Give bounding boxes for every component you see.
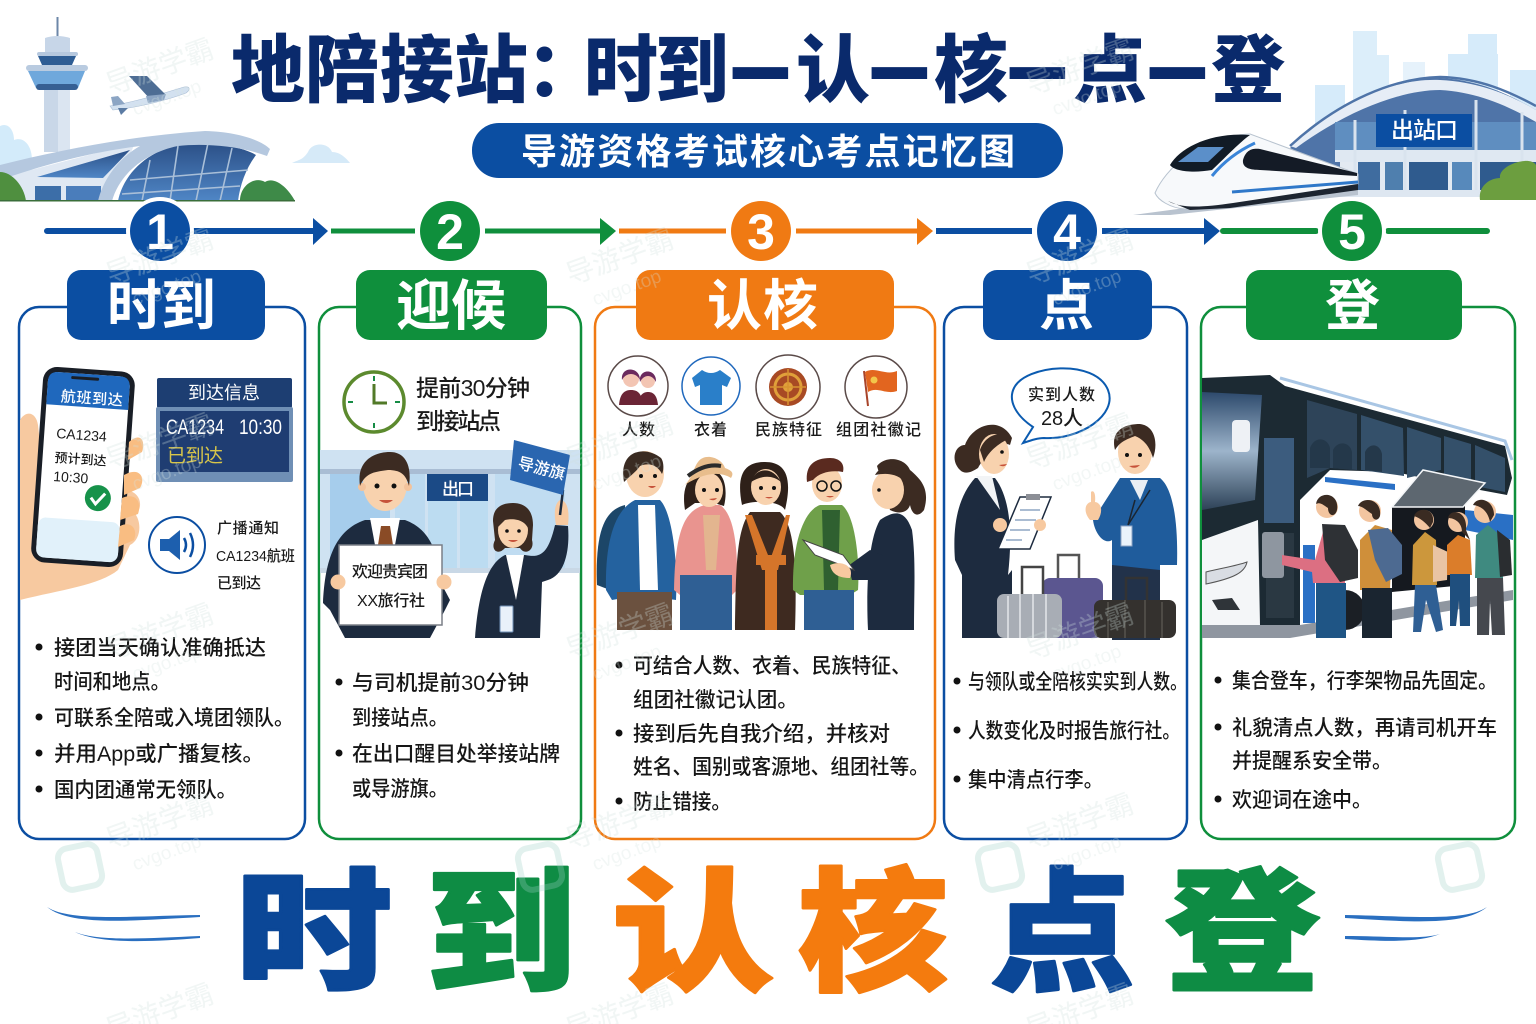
watermarks: 导游学霸 [1022,788,1138,855]
sign: station exit: 出站口 [1391,117,1458,143]
watermarks: cvgo.top [1050,831,1124,875]
bullet list: step 1 [36,637,294,802]
bullet list: step 2: 到接站点。 [352,707,448,730]
broadcast text: CA1234航班 [216,547,295,565]
mnemonic: 时到认核点登: 认 [612,825,774,1019]
step 4 number [1033,197,1101,265]
title: 登 [1211,11,1285,118]
watermarks: 导游学霸 [1022,598,1138,665]
step 2 number [416,197,484,265]
watermarks: 导游学霸 [102,223,218,290]
watermarks: cvgo.top [1050,76,1124,120]
watermarks: cvgo.top [590,641,664,685]
broadcast text [216,520,295,592]
passenger: pink jacket [1282,495,1358,638]
icon: ethnic pattern medallion [756,355,820,419]
watermarks: 导游学霸 [562,408,678,475]
mnemonic: 时到认核点登 [236,825,1320,1019]
step 1 number [126,197,194,265]
icon: airplane [110,76,189,115]
suitcase: black [1094,578,1176,638]
title: 认 [796,11,870,118]
icon: tour group flag [845,356,907,418]
heading tab: 认核 [636,270,894,340]
watermarks: cvgo.top [130,641,204,685]
icon labels: 民族特征 [755,421,822,439]
watermarks: 导游学霸 [1022,33,1138,100]
figure: male guide holding welcome sign [323,452,452,638]
illustration: hand holding phone: 预计到达 [54,450,107,469]
icon: clothing [682,357,740,415]
tourist: ethnic dress [735,462,796,630]
bullet list: step 2: 或导游旗。 [352,778,448,801]
bullet list: step 5: 集合登车，行李架物品先固定。 [1232,670,1497,693]
watermarks: 导游学霸 [1022,408,1138,475]
sign: exit [427,474,488,501]
clock caption: 提前30分钟 [416,375,530,401]
watermarks: cvgo.top [1050,451,1124,495]
heading tab: 认核: 认核 [707,275,818,337]
flag: 导游旗: 导游旗 [516,454,567,483]
heading tab: 时到: 时到 [107,275,216,337]
suitcase: silver [997,567,1062,638]
heading tab: 迎候 [356,270,547,340]
watermarks: cvgo.top [130,76,204,120]
bullet list: step 1: 时间和地点。 [54,671,170,694]
watermarks: cvgo.top [1050,266,1124,310]
watermarks: 导游学霸 [1022,223,1138,290]
watermarks: cvgo.top [130,451,204,495]
watermarks: cvgo.top [130,831,204,875]
bullet list: step 5: 礼貌清点人数，再请司机开车 [1232,717,1497,740]
passenger: orange top [1447,512,1472,626]
heading tab: 时到 [67,270,265,340]
timeline: step connector arrows [47,218,1487,245]
suitcase: purple [1042,555,1103,638]
illustration: airport terminal and control tower [0,17,350,202]
welcome sign: XX旅行社 [357,592,425,610]
passenger: ochre jacket [1358,500,1402,638]
figure: guide with clipboard [954,425,1051,638]
icon labels: 衣着 [694,421,727,439]
illustration: railway station and bullet train [1133,31,1536,215]
watermarks: 导游学霸 [102,408,218,475]
welcome sign [330,545,452,625]
tour bus [1202,375,1513,638]
speech bubble: headcount: 实到人数 [1028,385,1095,404]
passenger: mustard top with backpack [1412,510,1448,632]
illustration: tour bus boarding [1202,375,1513,638]
illustration: hand holding phone [20,366,143,600]
panel: step 5 登 [1201,270,1515,839]
watermarks: 导游学霸 [102,598,218,665]
icon: bullet train [1133,134,1358,215]
arrival information board: 10:30 [239,416,282,439]
heading tab: 迎候: 迎候 [396,275,506,337]
step 4 number: 4 [1053,204,1081,260]
clock caption: 到接站点 [416,408,501,434]
step 1 number: 1 [146,204,174,260]
mnemonic: 时到认核点登: 时 [236,826,392,1019]
broadcast text: 已到达 [217,575,261,592]
figure: female guide raising flag [475,440,570,638]
mnemonic: 时到认核点登: 到 [426,825,576,1019]
panel: step 4 点 [944,270,1187,839]
figure: tour leader with thumbs up [1086,424,1177,640]
watermarks: cvgo.top [130,266,204,310]
icon labels: 组团社徽记 [836,421,921,439]
bullet list: step 3: 姓名、国别或客源地、组团社等。 [633,756,929,779]
title: 地陪接站：时到 [231,11,729,118]
bullet list: step 3: 可结合人数、衣着、民族特征、 [633,655,911,678]
bullet list: step 1: 接团当天确认准确抵达 [54,637,266,660]
bullet list: step 1: 国内团通常无领队。 [54,779,237,802]
watermarks: 导游学霸 [562,788,678,855]
icon labels [622,421,921,439]
tourist: blue jacket [597,451,676,630]
title: — [871,19,928,109]
decorative swooshes right [1345,907,1487,941]
watermarks: cvgo.top [590,451,664,495]
watermarks: cvgo.top [590,831,664,875]
subtitle pill: 导游资格考试核心考点记忆图 [521,123,1015,175]
icon: clock [344,372,404,432]
arrival information board: 到达信息 [188,383,260,403]
step 3 number [727,197,795,265]
mnemonic: 时到认核点登: 登 [1165,826,1320,1019]
passenger: teal jacket [1473,500,1512,635]
title: 点 [1073,11,1147,118]
title: 核 [934,11,1008,118]
broadcast text: 广播通知 [217,520,279,537]
heading tab: 登 [1246,270,1462,340]
watermarks: cvgo.top [590,266,664,310]
icon labels: 人数 [622,421,655,439]
watermarks: 导游学霸 [102,788,218,855]
illustration: hand holding phone: CA1234 [56,425,108,445]
bullet list: step 3 [616,655,929,814]
heading tab: 登: 登 [1325,275,1380,337]
illustration: tourists and guide [597,451,926,630]
watermarks: 导游学霸 [562,598,678,665]
illustration: exit hall with welcome sign and guide flag [320,440,580,638]
title: — [1149,19,1206,109]
mnemonic: 时到认核点登: 点 [990,825,1134,1018]
panel: step 1 时到 [19,270,305,839]
bullet list: step 3: 防止错接。 [633,791,731,814]
watermarks: 导游学霸 [102,33,218,100]
sign: exit: 出口 [442,480,474,499]
clock caption [416,375,530,434]
step 5 number [1318,197,1386,265]
arrival information board [156,378,293,482]
title: — [1009,19,1066,109]
bullet list: step 4: 与领队或全陪核实实到人数。 [968,671,1187,694]
panel: step 3 认核 [595,270,935,839]
bullet list: step 2: 在出口醒目处举接站牌 [352,743,560,766]
step 2 number: 2 [436,204,464,260]
passengers boarding [1282,495,1512,638]
bullet list: step 2: 与司机提前30分钟 [352,672,529,695]
bullet list: step 3: 组团社徽记认团。 [633,689,798,712]
panel: step 2 迎候 [319,270,581,839]
title: — [732,19,789,109]
bullet list: step 1: 可联系全陪或入境团领队。 [54,707,294,730]
welcome sign: 欢迎贵宾团 [352,563,428,581]
guide with clipboard [803,459,926,630]
decorative swooshes left [47,907,200,941]
illustration: hand holding phone: 10:30 [53,468,89,486]
step 5 number: 5 [1338,204,1366,260]
bullet list: step 5: 欢迎词在途中。 [1232,789,1372,812]
bullet list: step 5 [1214,670,1497,812]
speech bubble: headcount [1012,368,1110,443]
arrival information board: 已到达 [167,445,223,467]
title [231,11,1285,118]
mnemonic: 时到认核点登: 核 [798,825,948,1019]
bullet list: step 4: 集中清点行李。 [968,769,1103,792]
arrival information board: CA1234 [166,416,224,439]
bullet list: step 3: 接到后先自我介绍，并核对 [633,723,890,746]
heading tab: 点 [983,270,1152,340]
step 3 number: 3 [747,204,775,260]
heading tab: 点: 点 [1039,275,1094,337]
bullet list: step 1: 并用App或广播复核。 [54,743,264,766]
icon: headcount [608,356,668,416]
bullet list: step 4: 人数变化及时报告旅行社。 [968,720,1180,743]
bullet list: step 4 [954,671,1187,792]
illustration: hand holding phone: 航班到达 [60,387,123,410]
speech bubble: headcount: 28人 [1041,407,1083,430]
watermarks: cvgo.top [1050,641,1124,685]
tourist: green jacket with glasses [793,458,858,630]
bullet list: step 2 [336,672,560,801]
sign: station exit [1376,114,1472,147]
watermarks: 导游学霸 [562,223,678,290]
tourist: pink jacket with hat [674,457,737,630]
bullet list: step 5: 并提醒系安全带。 [1232,750,1392,773]
luggage group [997,555,1176,638]
flag: 导游旗 [510,440,570,495]
icon: loudspeaker [149,517,205,573]
